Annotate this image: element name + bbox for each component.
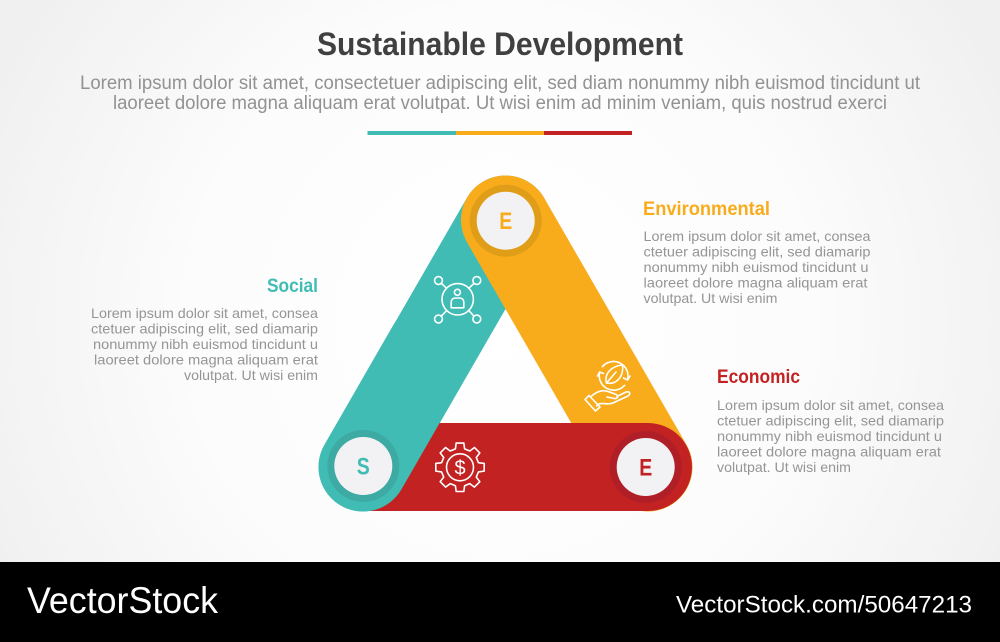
body: environmental bbox=[644, 229, 871, 306]
body: social: Lorem ipsum dolor sit amet, consea bbox=[91, 306, 318, 321]
band: social bbox=[363, 220, 506, 467]
body: social: nonummy nibh euismod tincidunt u bbox=[93, 337, 318, 352]
body: environmental: nonummy nibh euismod tincidunt u bbox=[644, 260, 868, 275]
body: economic: nonummy nibh euismod tincidunt u bbox=[717, 429, 942, 444]
body: environmental: Lorem ipsum dolor sit amet, consea bbox=[644, 229, 871, 244]
body: social: laoreet dolore magna aliquam erat bbox=[94, 352, 318, 368]
text block: economic bbox=[717, 367, 944, 475]
subtitle text block: Lorem ipsum dolor sit amet, consectetuer adipiscing elit, sed diam nonummy nibh euismod tincidunt ut bbox=[80, 73, 921, 94]
body: social: ctetuer adipiscing elit, sed diamarip bbox=[91, 322, 318, 336]
heading: economic: Economic bbox=[717, 367, 800, 388]
body: environmental: volutpat. Ut wisi enim bbox=[644, 291, 778, 306]
body: social bbox=[91, 306, 318, 383]
body: economic: Lorem ipsum dolor sit amet, consea bbox=[717, 398, 944, 413]
heading: social: Social bbox=[267, 276, 318, 297]
body: economic bbox=[717, 398, 944, 475]
title: Sustainable Development bbox=[317, 26, 683, 62]
icon: social network person bbox=[435, 277, 481, 323]
body: economic: volutpat. Ut wisi enim bbox=[717, 460, 851, 475]
subtitle text block: laoreet dolore magna aliquam erat volutpat. Ut wisi enim ad minim veniam, quis nostrud exerci bbox=[113, 93, 887, 114]
text block: social bbox=[91, 276, 318, 383]
subtitle text block bbox=[80, 73, 921, 114]
icon: gear with dollar: $ bbox=[454, 457, 466, 479]
icon: gear with dollar bbox=[436, 443, 484, 491]
footer bar bbox=[0, 562, 1000, 642]
tricolor divider bbox=[368, 131, 632, 135]
band: economic bbox=[363, 423, 648, 511]
band: social overlap bbox=[363, 347, 432, 467]
body: environmental: ctetuer adipiscing elit, sed diamarip bbox=[644, 244, 870, 260]
footer url text: VectorStock.com/50647213 bbox=[676, 592, 972, 618]
node: economic E: E bbox=[639, 454, 652, 482]
node: social S: S bbox=[357, 454, 370, 480]
body: economic: ctetuer adipiscing elit, sed diamarip bbox=[717, 414, 944, 428]
node: social S bbox=[327, 430, 399, 502]
node: environmental E bbox=[470, 185, 542, 257]
body: social: volutpat. Ut wisi enim bbox=[184, 368, 318, 383]
band: environmental bbox=[506, 220, 648, 467]
triangle diagram bbox=[327, 185, 682, 503]
text block: environmental bbox=[643, 199, 871, 306]
body: economic: laoreet dolore magna aliquam erat bbox=[717, 444, 941, 460]
heading: environmental: Environmental bbox=[643, 199, 770, 220]
node: economic E bbox=[610, 431, 682, 503]
icon: hand with leaf cycle bbox=[585, 361, 630, 411]
footer logo text: VectorStock bbox=[27, 580, 218, 621]
node: environmental E: E bbox=[499, 208, 512, 235]
body: environmental: laoreet dolore magna aliquam erat bbox=[644, 276, 868, 290]
